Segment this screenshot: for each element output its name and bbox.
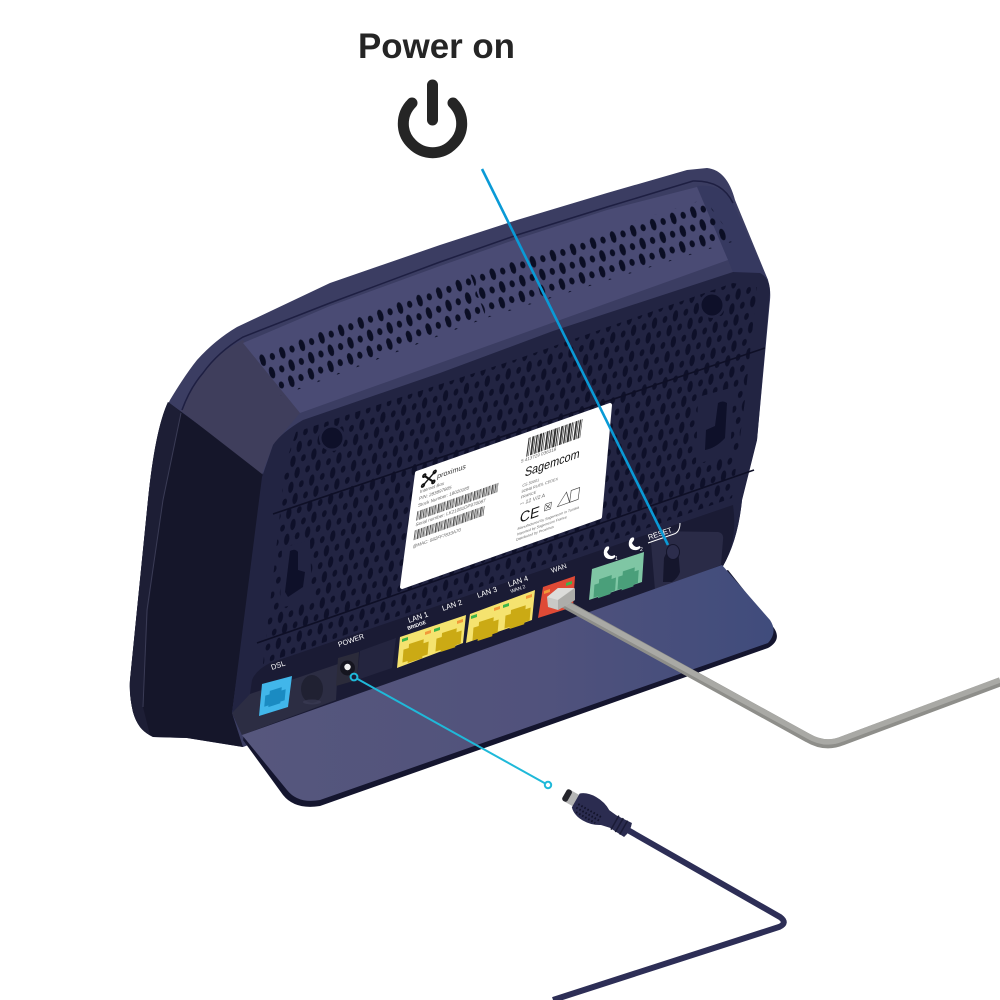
- port labels: LAN 1: [407, 610, 429, 625]
- sticker content: proximus: [437, 462, 467, 481]
- sticker content: CS 50001: [522, 477, 540, 488]
- router body silhouette: [130, 168, 770, 747]
- sticker content: [408, 415, 592, 580]
- left keyhole slot: [280, 540, 312, 608]
- sticker content: Serial number: LK21081DP970087: [415, 498, 486, 528]
- reset panel: [650, 531, 723, 590]
- side panel highlight: [143, 413, 181, 707]
- top vent holes: [255, 199, 735, 396]
- phone icons: 2: [640, 547, 643, 553]
- phone icons: [604, 537, 643, 562]
- phone icons: 1: [615, 556, 618, 562]
- ethernet plug: [547, 588, 575, 610]
- port labels: POWER: [337, 632, 365, 649]
- sticker content: Imported by Sagemcom France: [517, 515, 567, 537]
- port: WAN: [538, 576, 575, 618]
- sticker content: ☒: [543, 501, 553, 515]
- sticker content: ⎓ 12 V/2 A: [519, 493, 546, 508]
- port labels: WAN 2: [510, 584, 527, 595]
- stand: [242, 565, 777, 807]
- label sticker: [402, 405, 610, 587]
- screw hole left: [319, 425, 345, 451]
- port band: [243, 505, 734, 740]
- port labels: [270, 525, 674, 672]
- router: [130, 168, 777, 807]
- lower panel around DSL: [232, 664, 338, 735]
- seam lines: [257, 348, 765, 643]
- port labels: LAN 3: [476, 585, 498, 600]
- screw hole right: [699, 292, 725, 318]
- left chamfer: [181, 340, 300, 474]
- reset underline: [648, 523, 680, 543]
- sticker content: Manufactured by Sagemcom in Tunisia: [517, 505, 580, 531]
- ports: LAN 1 and LAN 2: [397, 615, 466, 668]
- port: DSL: [259, 676, 292, 716]
- reset callout line: [482, 169, 668, 545]
- sticker content: FRANCE: [521, 489, 537, 500]
- top ridge line: [182, 181, 733, 410]
- back face: [232, 272, 770, 735]
- power callout line: [351, 674, 551, 788]
- unused round port: [301, 675, 323, 704]
- icon: power symbol: [403, 85, 462, 153]
- ports: LAN 3 and LAN 4: [466, 590, 535, 643]
- port labels: DSL: [270, 659, 286, 672]
- side panel outer strip: [130, 402, 181, 735]
- right facet: [697, 186, 768, 280]
- port labels: LAN 4: [507, 574, 529, 589]
- sticker content: Stock Number: 18020185: [418, 485, 470, 509]
- ports: phone: [589, 552, 644, 600]
- sticker content: Sagemcom: [524, 446, 581, 480]
- right keyhole slot: [696, 387, 734, 464]
- port: power socket: [336, 652, 359, 686]
- dark side panel: [130, 402, 264, 747]
- top vent panel: [243, 187, 728, 413]
- port labels: WAN: [550, 563, 568, 575]
- sticker content: P/N: 283897805: [419, 485, 452, 502]
- sticker content: @MAC: 582FF7833A70: [412, 527, 462, 550]
- port labels: RESET: [647, 525, 674, 542]
- sticker content: Distributed by Proximus: [516, 525, 554, 542]
- proximus logo: [421, 470, 436, 487]
- power cable: [553, 829, 784, 1000]
- sticker content: 92848 RUEIL CEDEX: [521, 476, 559, 494]
- reset button: [663, 544, 680, 582]
- gray ethernet cable: [563, 602, 1000, 744]
- sticker content: 5 413729 036318: [521, 446, 557, 465]
- power plug: [558, 783, 636, 843]
- port labels: BRIDGE: [407, 620, 428, 632]
- title: Power on: [358, 27, 515, 66]
- back face holes: [263, 283, 757, 664]
- sticker content: Internet Box: [419, 481, 445, 495]
- power recess panel: [357, 638, 396, 680]
- port labels: LAN 2: [441, 598, 463, 613]
- sticker content: CE: [519, 503, 541, 527]
